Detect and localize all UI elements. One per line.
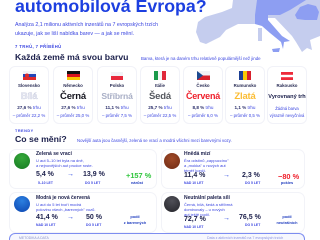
description: téměř končí. [184,168,206,172]
change: −80 % [278,172,299,180]
card: Rumunsko [225,66,265,124]
old value: 11,4 % [184,172,205,179]
change: +157 % [126,170,151,180]
flag: Austria [281,72,293,80]
flag: Slovakia [23,71,36,80]
country name: Německo [63,82,83,88]
country name: Rumunsko [234,82,256,88]
card: Německo [53,66,93,124]
card: Rakousko [267,66,307,124]
new value: 2,3 % [242,172,260,179]
colour name: Šedá [149,90,171,102]
country name: Slovensko [18,82,40,88]
flag: Italy [154,71,166,80]
summary text: Data z aktivních inzerátů na 7 evropských trzích [207,236,283,240]
card: Itálie [140,66,180,124]
card: Česko [183,66,223,124]
note [270,106,304,118]
note: výrazně nevyčnívá [270,112,304,118]
average: – průměr 22,5 % [144,112,176,118]
colour name: Vyrovnaný trh [268,94,306,100]
heading: Hnědá mizí [184,151,210,157]
heading: Modrá je nová červená [36,195,90,201]
arrow: → [223,215,230,222]
description [184,202,232,217]
description: a „mokka" u nových aut [184,162,226,168]
change label: podíl [282,214,292,219]
description: Černá, bílá, šedá a stříbrná [184,202,232,206]
section label: 7 TRHŮ, 7 PŘÍBĚHŮ [15,44,62,49]
old label: NAD 10 LET [36,223,55,227]
old label: NAD 10 LET [184,181,203,185]
trends label: TRENDY [15,129,34,133]
trend card: brown [161,149,305,189]
new value: 50 % [86,214,102,221]
average: – průměr 0,5 % [230,112,260,118]
country name: Itálie [155,82,165,88]
change label [276,214,298,225]
trend card: neutral [161,192,305,233]
country name: Česko [196,82,210,88]
icon: green dot [14,153,30,169]
icon: brown dot [164,153,180,169]
new label: DO 5 LET [86,223,101,227]
change label: neutrálních [276,220,297,225]
heading: Neutrální paleta sílí [184,195,230,201]
arrow: → [67,171,74,178]
heading: Zelená se vrací [36,151,72,157]
old label: NAD 10 LET [184,224,203,228]
arrow: → [223,172,230,179]
change label [124,214,146,225]
new label: DO 5 LET [245,222,260,226]
intro text [15,22,158,36]
card: Polsko [97,66,137,124]
old value: 41,4 % [36,214,58,221]
new label: DO 5 LET [85,181,100,185]
section note: Barva, která je na daném trhu relativně populárnější než jinde [141,56,261,60]
flag: Poland [111,72,123,80]
country name: Polsko [110,82,124,88]
intro text: ukazuje, jak se liší nabídka barev — a jak se mění. [15,30,134,36]
description: a nejnovějších aut prudce roste. [36,162,93,168]
average: – průměr 7,5 % [102,112,132,118]
average: – průměr 22,2 % [13,112,45,118]
change label: z barevných [124,220,146,225]
country name: Rakousko [276,82,297,88]
flag: Romania [239,71,251,80]
colour name: Stříbrná [101,91,133,101]
description: polovinu všech „barevných" vozů. [36,206,95,212]
colour name: Bílá [21,90,37,102]
new value: 13,9 % [83,171,105,178]
intro text: Analýza 2,1 milionu aktivních inzerátů na 7 evropských trzích [15,22,158,28]
map of Europe [196,0,320,52]
description: aut ještě podíl. [184,212,210,216]
description [184,158,229,172]
description [36,158,93,168]
icon: blue dot [14,196,30,212]
trend card: green [9,149,157,189]
change label: nárůst [131,180,143,185]
description [36,202,96,212]
description: U aut do 5 let tvoří modrá [36,202,81,206]
card: Slovensko [9,66,49,124]
average: – průměr 25,0 % [57,112,89,118]
change label: pokles [281,180,293,185]
icon: dark dot [164,196,180,212]
share: 1,1 % trhu [235,105,255,110]
trends note: Novější auta jsou časnější, zelená se vrací a modrá všichni mezi barevnými vozy. [77,138,232,142]
colour name: Červená [186,91,220,101]
share: 11,1 % trhu [105,105,129,110]
summary label: METODIKA A DATA [19,236,49,240]
arrow: → [67,214,74,221]
share: 8,8 % trhu [193,105,213,110]
note: Žádná barva [275,106,299,110]
colour name: Zlatá [234,90,256,102]
new value: 76,5 % [239,214,261,221]
share: 25,7 % trhu [148,105,172,110]
bottom summary panel [9,233,305,240]
old label: 5–10 LET [38,181,53,185]
colour name: Černá [60,90,86,102]
share: 27,6 % trhu [17,105,41,110]
section heading: Každá země má svou barvu [15,52,128,62]
trend card: blue [9,192,157,233]
flag: Czechia [197,71,210,80]
description: U aut 5–10 let byla na dně, [36,158,84,162]
trends heading: Co se mění? [15,134,67,144]
old value: 72,7 % [184,216,206,223]
flag: Germany [67,71,80,80]
change label: podíl [130,214,140,219]
description: dominovaly – u nových [184,206,225,212]
new label: DO 5 LET [245,181,260,185]
average: – průměr 6,0 % [188,112,218,118]
description: Éra odstínů „cappuccino" [184,158,229,162]
share: 27,6 % trhu [61,105,85,110]
old value: 5,4 % [36,171,54,178]
